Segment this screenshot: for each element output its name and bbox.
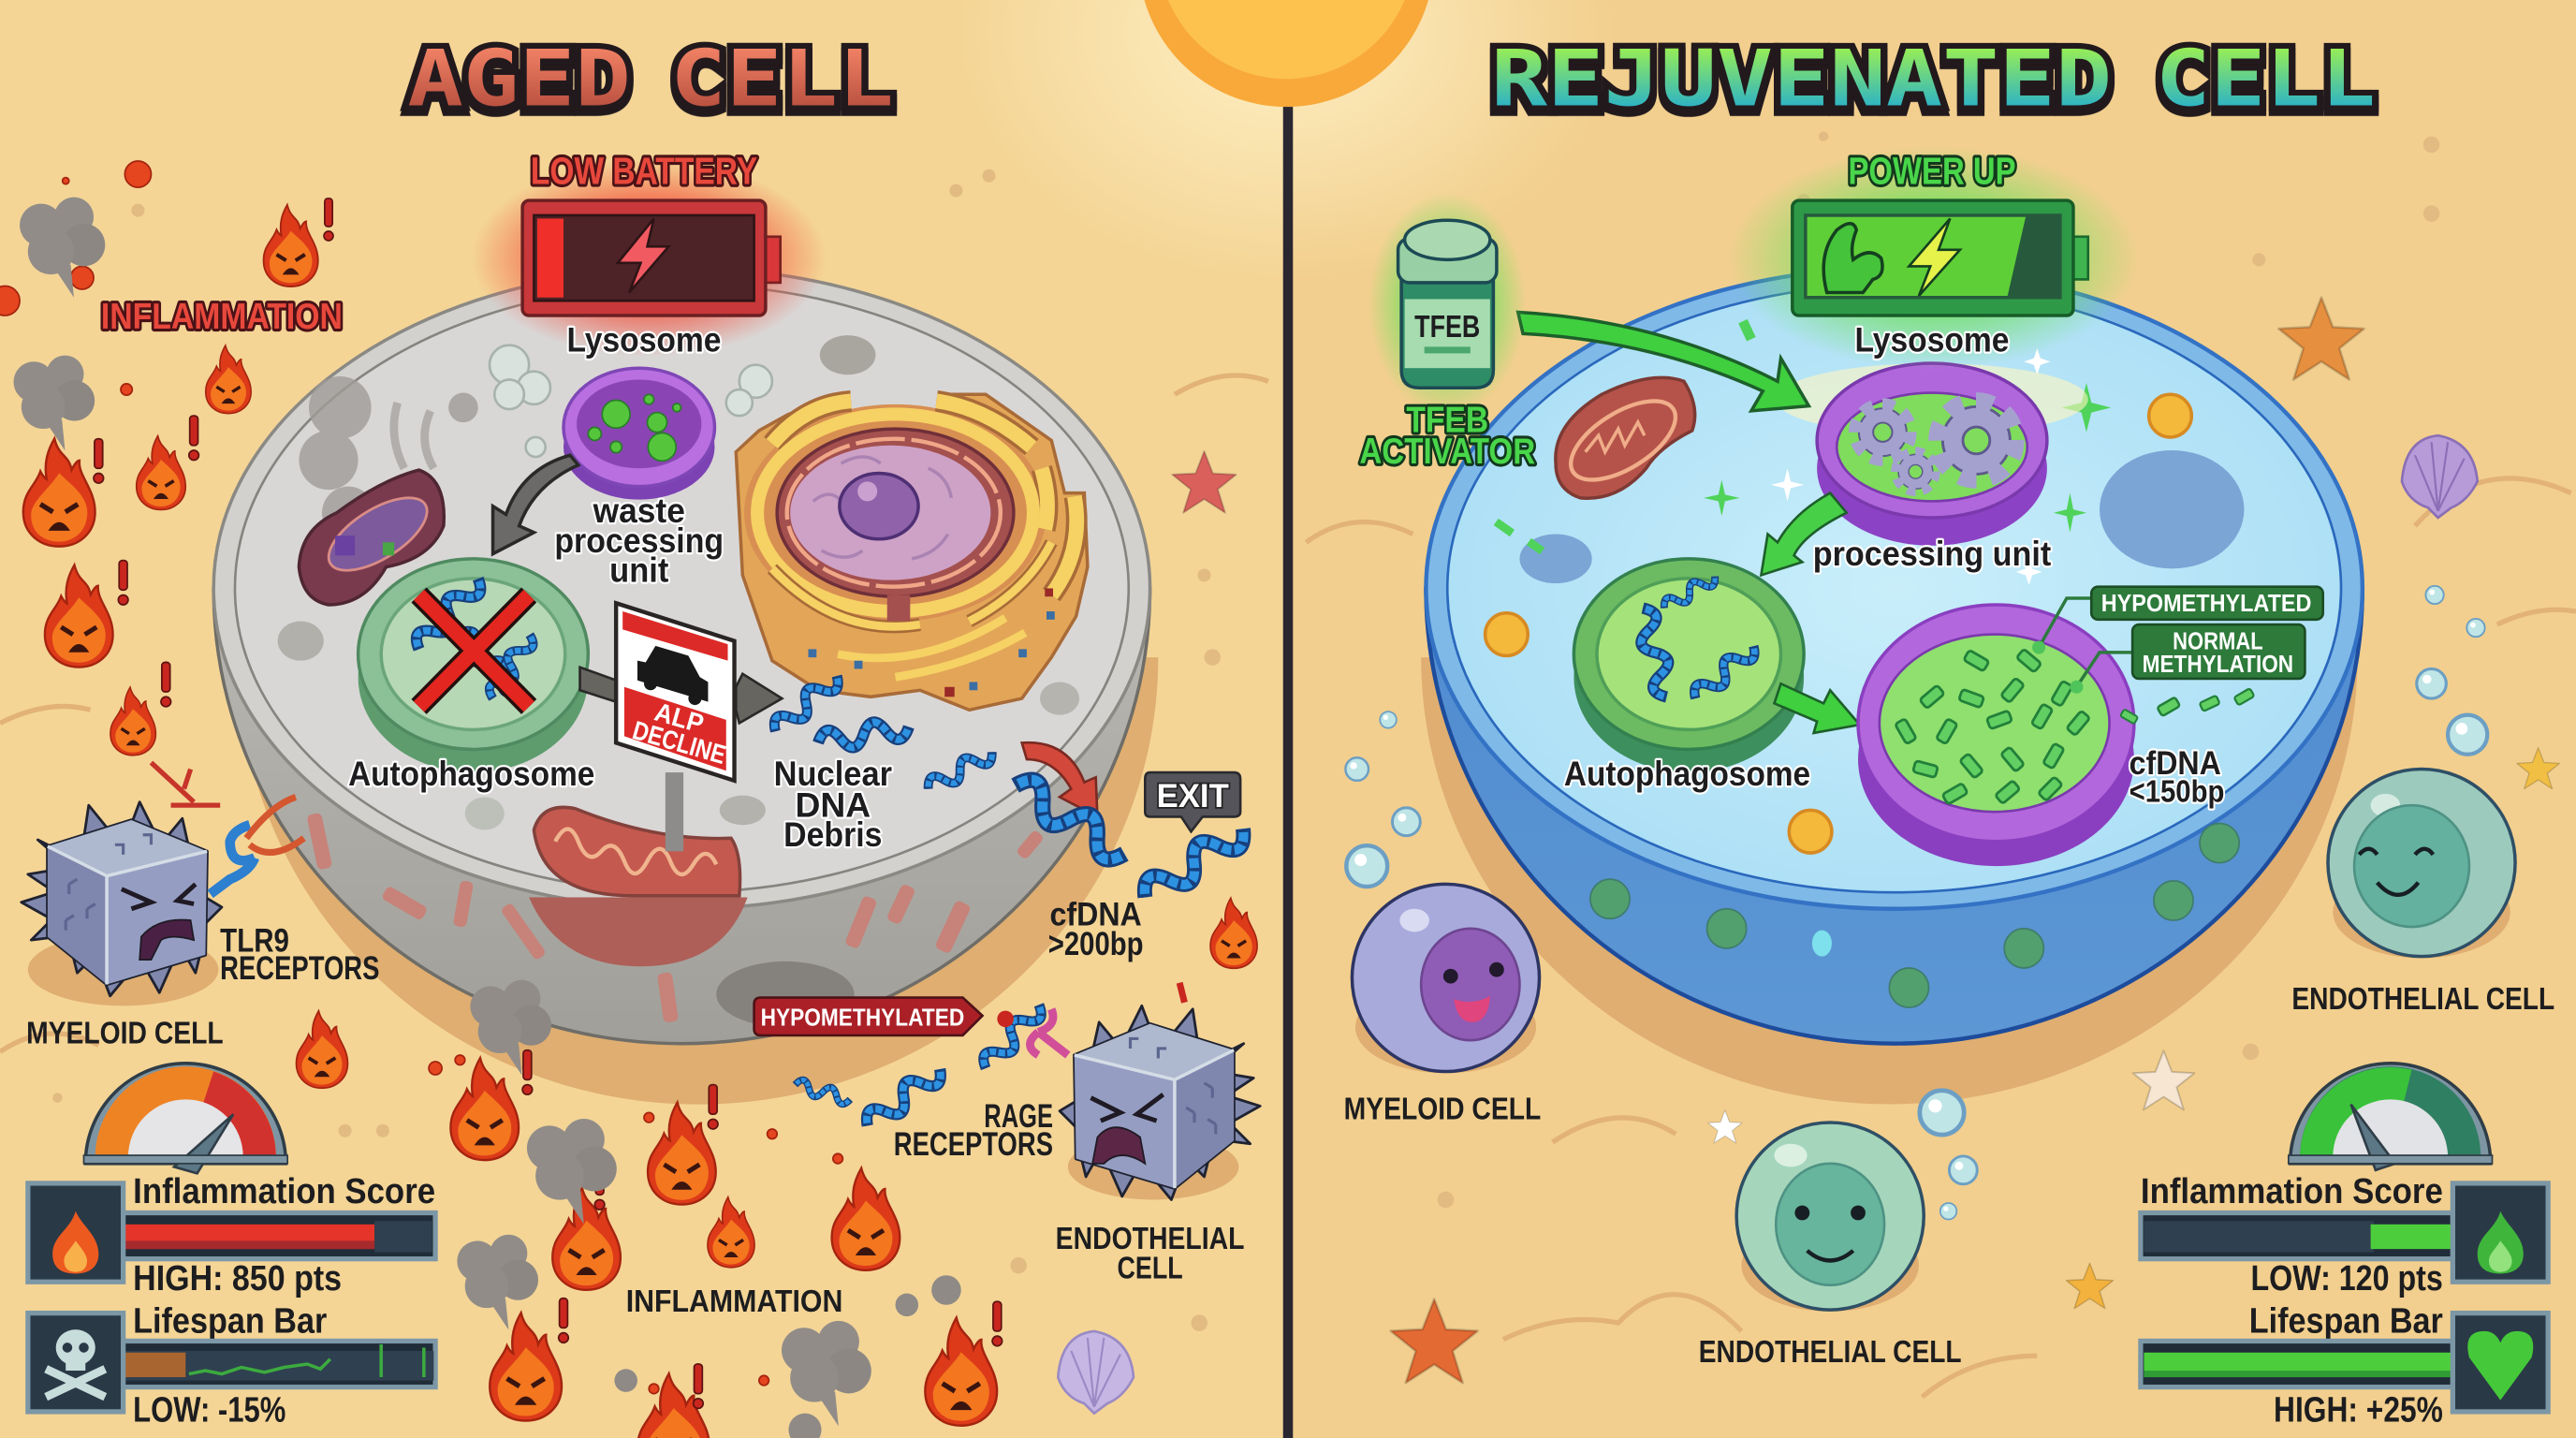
status bar: inflammation score low: Inflammation Score <box>2141 1171 2443 1211</box>
sign: ALP decline <box>616 603 735 851</box>
label: autophagosome: Autophagosome <box>348 755 594 793</box>
panel: rejuvenated cell <box>1344 34 2559 1429</box>
label: myeloid cell: MYELOID CELL <box>1344 1092 1541 1126</box>
status bar: lifespan low <box>28 1301 435 1429</box>
label: RAGE receptors: RECEPTORS <box>894 1126 1053 1163</box>
starfish <box>1391 298 2559 1383</box>
status bar: lifespan low: LOW: -15% <box>133 1389 285 1429</box>
exit arrow, red <box>1022 742 1097 816</box>
EXIT badge: EXIT <box>1157 778 1229 814</box>
icon: TFEB bottle <box>1368 192 1526 416</box>
endothelial cell, angry <box>1060 1005 1260 1199</box>
status bar: inflammation score high <box>28 1171 435 1298</box>
myeloid cell, angry <box>22 802 222 1005</box>
label: lysosome: Lysosome <box>567 321 721 360</box>
label: cfDNA <150bp: <150bp <box>2130 775 2224 810</box>
label: nuclear DNA debris <box>774 755 892 854</box>
label: lysosome: Lysosome <box>1855 321 2009 360</box>
icon: shell <box>1058 1331 1134 1414</box>
cfDNA strands <box>1007 773 1251 909</box>
status bar: inflammation score high: Inflammation Score <box>133 1171 435 1211</box>
icon: autophagosome, blocked <box>359 559 588 772</box>
endothelial cell, bottom <box>1736 1123 1924 1312</box>
icon: lysosome, purple <box>564 368 714 500</box>
cell body: rejuvenated <box>1421 268 2363 1104</box>
myeloid cell, happy <box>1352 884 1540 1073</box>
arrow: autophagosome to vessel, green <box>1775 683 1860 733</box>
status bar: lifespan high <box>2141 1301 2548 1429</box>
label: low battery: LOW BATTERY <box>531 150 757 193</box>
icon: mitochondrion, healthy <box>1556 377 1695 498</box>
label: waste processing unit: waste <box>593 492 685 530</box>
endothelial cell, right <box>2328 770 2515 958</box>
RAGE receptor with DNA <box>794 983 1184 1134</box>
gauge: low inflammation <box>2289 1064 2492 1170</box>
hypomethylated tag: HYPOMETHYLATED <box>761 1003 964 1031</box>
label: endothelial cell, bottom: ENDOTHELIAL CELL <box>1699 1335 1962 1370</box>
label: TFEB activator <box>1359 401 1535 472</box>
label: nuclear DNA debris: Nuclear <box>774 755 892 793</box>
label: RAGE receptors <box>894 1098 1053 1163</box>
label: nuclear DNA debris: Debris <box>783 815 882 854</box>
icon: starfish, red <box>1172 451 1237 513</box>
battery: power up <box>1728 146 2139 370</box>
battery: low <box>472 159 827 357</box>
mitochondrion: bottom <box>534 807 740 896</box>
sun <box>1138 0 1434 107</box>
DNA debris <box>769 668 996 797</box>
tag: normal methylation: METHYLATION <box>2143 650 2293 678</box>
flame enemies <box>0 161 1257 1438</box>
label: endothelial cell <box>1056 1222 1244 1286</box>
sign: ALP decline: DECLINE <box>630 715 729 770</box>
label: waste processing unit: processing <box>554 521 724 560</box>
title: rejuvenated cell: CELL <box>2156 34 2376 124</box>
title: rejuvenated cell <box>1491 34 2376 124</box>
icon: TFEB bottle: TFEB <box>1414 310 1480 345</box>
smoke from damaged mitochondrion <box>299 376 478 539</box>
sparkles <box>1494 319 2111 554</box>
label: waste processing unit <box>554 492 724 589</box>
label: nuclear DNA debris: DNA <box>795 785 871 824</box>
label: TLR9 receptors <box>220 922 379 987</box>
label: myeloid cell: MYELOID CELL <box>26 1017 224 1051</box>
tag: normal methylation: NORMAL <box>2173 626 2263 654</box>
cell body: aged <box>213 268 1158 1105</box>
icon: autophagosome, active <box>1573 559 1804 772</box>
centre divider <box>1283 107 1293 1438</box>
title: rejuvenated cell: REJUVENATED <box>1491 34 2112 124</box>
label: TLR9 receptors: TLR9 <box>220 922 289 959</box>
smoke clouds <box>13 198 961 1438</box>
status bar: inflammation score low <box>2141 1171 2548 1298</box>
title: aged cell: AGED <box>407 34 631 124</box>
hypomethylated tag <box>754 998 983 1035</box>
status bar: inflammation score high: HIGH: 850 pts <box>133 1258 342 1298</box>
arrow: blocked path, grey <box>580 668 782 723</box>
status bar: inflammation score low: LOW: 120 pts <box>2250 1258 2443 1298</box>
label: endothelial cell: CELL <box>1117 1252 1183 1286</box>
label: cfDNA <150bp: cfDNA <box>2130 745 2221 782</box>
label: TLR9 receptors: RECEPTORS <box>220 950 379 987</box>
icon: shell <box>2402 435 2478 518</box>
label: RAGE receptors: RAGE <box>984 1098 1053 1135</box>
label: cfDNA >200bp: >200bp <box>1048 926 1144 962</box>
label: processing unit: processing unit <box>1813 535 2051 573</box>
icon: purple vessel with short fragments <box>1858 605 2134 866</box>
sign: ALP decline: ALP <box>651 697 707 739</box>
label: cfDNA <150bp <box>2130 745 2224 810</box>
label: autophagosome: Autophagosome <box>1564 755 1810 793</box>
arrow: lysosome to autophagosome, green <box>1761 493 1847 575</box>
small fragments leaving the vessel <box>2120 688 2254 724</box>
label: endothelial cell: ENDOTHELIAL <box>1056 1222 1244 1256</box>
status bar: lifespan high: HIGH: +25% <box>2274 1389 2443 1429</box>
arrow: TFEB to lysosome, green <box>1518 313 1808 411</box>
icon: lysosome with gears <box>1776 363 2088 546</box>
red bump under mitochondrion <box>529 897 748 966</box>
label: TFEB activator: ACTIVATOR <box>1359 432 1535 472</box>
label: inflammation, bottom: INFLAMMATION <box>626 1284 842 1319</box>
mitochondrion: damaged <box>299 470 444 605</box>
nucleus with endoplasmic reticulum <box>736 394 1088 710</box>
white puffs <box>490 345 772 457</box>
title: aged cell <box>407 34 894 124</box>
arrow: lysosome to autophagosome, grey <box>493 455 578 554</box>
label: waste processing unit: unit <box>609 550 668 589</box>
TLR9 receptor with DNA <box>151 763 304 894</box>
title: aged cell: CELL <box>670 34 894 124</box>
label: power up: POWER UP <box>1848 150 2016 193</box>
bubbles <box>1345 586 2487 1220</box>
coins <box>1486 394 2191 853</box>
label: cfDNA >200bp <box>1048 896 1144 962</box>
label: cfDNA >200bp: cfDNA <box>1050 896 1142 932</box>
tag: hypomethylated <box>2032 587 2323 654</box>
EXIT badge <box>1145 772 1240 831</box>
status bar: lifespan high: Lifespan Bar <box>2249 1301 2443 1341</box>
label: TFEB activator: TFEB <box>1406 401 1488 441</box>
gauge: high inflammation <box>84 1064 287 1173</box>
panel: aged cell <box>0 34 1260 1438</box>
status bar: lifespan low: Lifespan Bar <box>133 1301 328 1341</box>
tag: hypomethylated: HYPOMETHYLATED <box>2101 589 2311 617</box>
label: inflammation, top left: INFLAMMATION <box>101 297 343 337</box>
tag: normal methylation <box>2070 624 2305 694</box>
